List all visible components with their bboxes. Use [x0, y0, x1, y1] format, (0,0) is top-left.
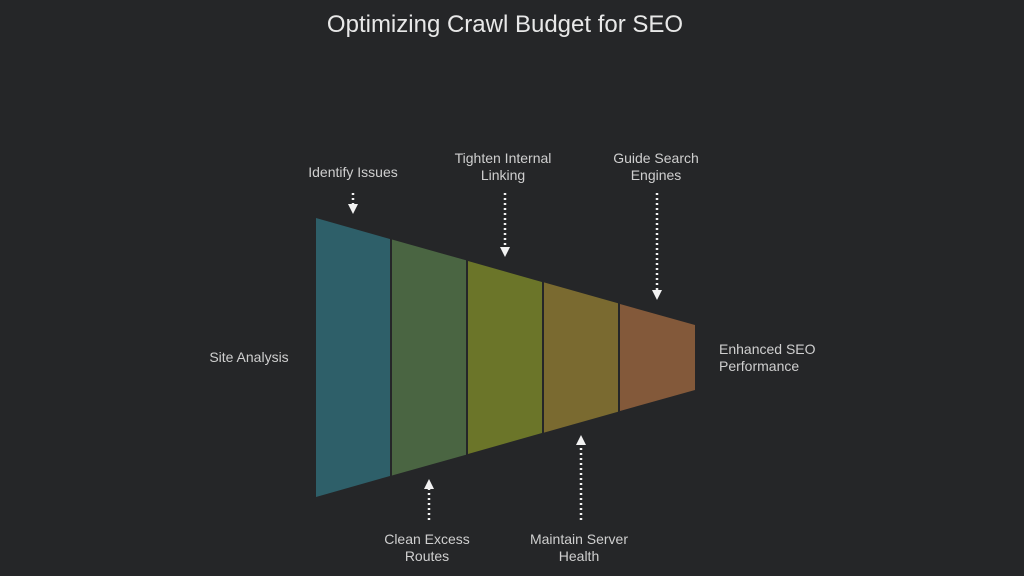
segment: maintain server: [544, 282, 618, 433]
label: site analysis: Site Analysis: [209, 349, 289, 365]
segment: tighten linking: [468, 261, 542, 454]
label: guide search: Guide Search: [613, 150, 699, 166]
label: clean routes: Routes: [405, 548, 449, 564]
label: tighten linking: Tighten Internal: [455, 150, 551, 166]
arrow: tighten linking: [504, 193, 506, 252]
arrow: identify issues: [352, 193, 354, 209]
label: identify issues: Identify Issues: [308, 164, 398, 180]
label: enhanced seo: Enhanced SEO: [719, 341, 816, 357]
arrow: clean routes: [428, 484, 430, 520]
funnel: [316, 218, 695, 497]
label: clean routes: Clean Excess: [384, 531, 470, 547]
label: tighten linking: Linking: [481, 167, 525, 183]
title: Optimizing Crawl Budget for SEO: [327, 11, 683, 38]
label: maintain server: Health: [559, 548, 599, 564]
segment: guide search: [620, 304, 695, 411]
arrow: guide search: [656, 193, 658, 295]
label: enhanced seo: Performance: [719, 358, 799, 374]
segment: identify issues: [392, 240, 466, 476]
arrow: maintain server: [580, 440, 582, 520]
label: maintain server: Maintain Server: [530, 531, 628, 547]
label: guide search: Engines: [631, 167, 681, 183]
segment: site analysis: [316, 218, 390, 497]
